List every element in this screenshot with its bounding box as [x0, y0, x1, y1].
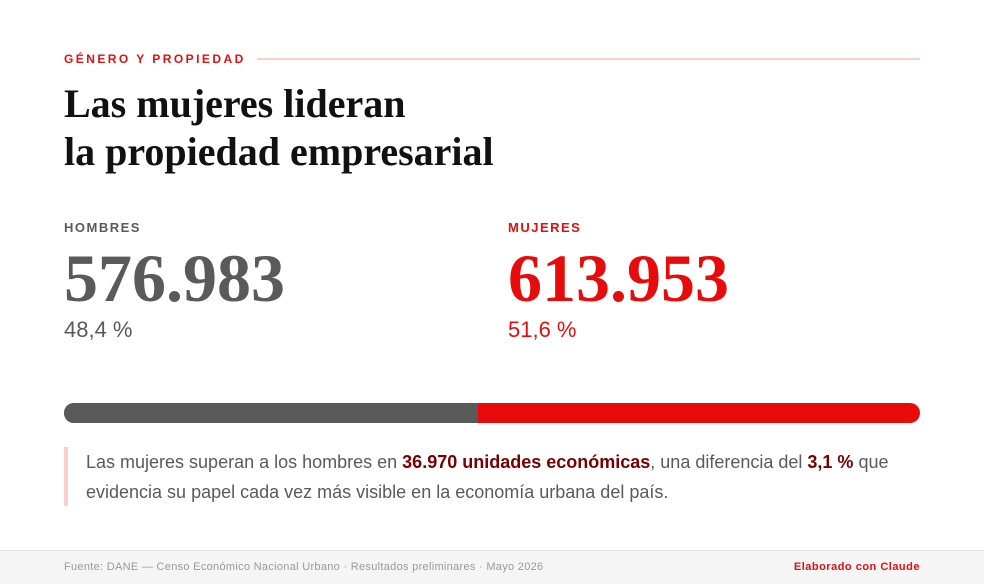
- callout: evidencia su papel cada vez más visible en la economía urbana del país.: [86, 482, 668, 502]
- eyebrow rule: [257, 58, 920, 60]
- stat: hombres: [64, 220, 285, 342]
- title: [64, 81, 494, 174]
- credit: Elaborado con Claude: [794, 561, 920, 573]
- mujeres label: MUJERES: [508, 220, 581, 235]
- title: la propiedad empresarial: [64, 129, 494, 174]
- hombres percentage: 48,4 %: [64, 317, 132, 342]
- hombres label: HOMBRES: [64, 220, 141, 235]
- proportion bar: [64, 403, 920, 423]
- mujeres number: 613.953: [508, 240, 729, 316]
- eyebrow label: GÉNERO Y PROPIEDAD: [64, 52, 246, 66]
- hombres number: 576.983: [64, 240, 285, 316]
- stat: mujeres: [508, 220, 729, 342]
- callout: [64, 447, 920, 506]
- hombres segment: [64, 403, 478, 423]
- source text: Fuente: DANE — Censo Económico Nacional Urbano · Resultados preliminares · Mayo 2026: [64, 561, 543, 573]
- callout: Las mujeres superan a los hombres en 36.970 unidades económicas, una diferencia del 3,1 % que: [86, 452, 888, 472]
- title: Las mujeres lideran: [64, 81, 405, 126]
- mujeres percentage: 51,6 %: [508, 317, 576, 342]
- footer: [0, 550, 984, 584]
